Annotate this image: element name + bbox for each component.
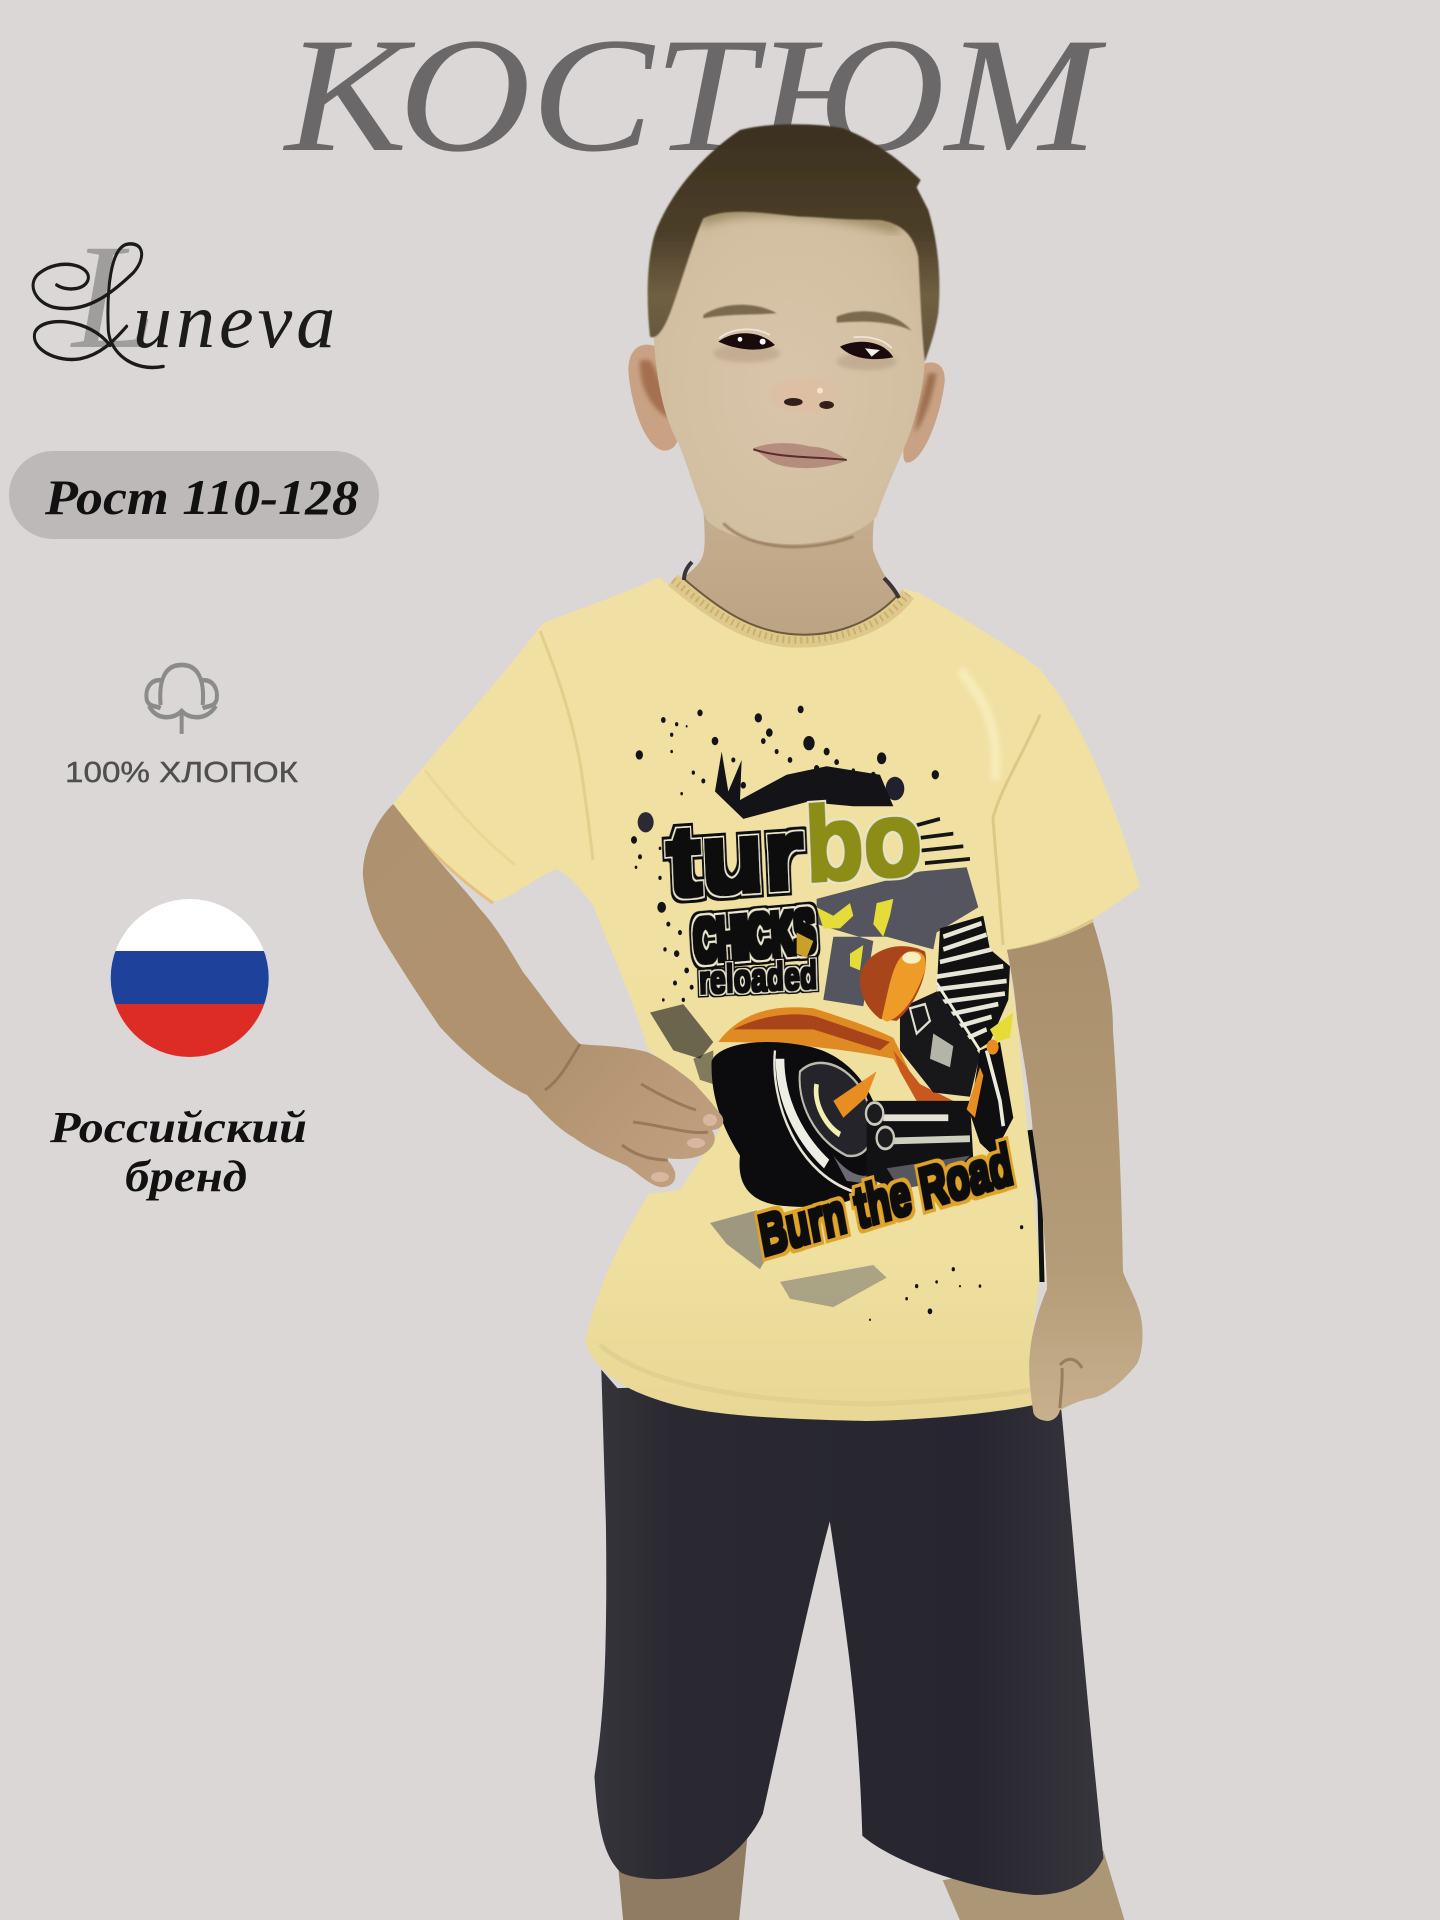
print: turbo lettering xyxy=(665,779,924,916)
cotton label: 100% ХЛОПОК xyxy=(65,757,298,789)
infographic canvas xyxy=(9,41,1142,1920)
icon: russian flag xyxy=(110,899,269,1057)
brand origin text xyxy=(49,1103,307,1201)
print: burn the road lettering: Burn the Road xyxy=(754,1134,1017,1268)
print: ink splatter xyxy=(631,706,1023,1321)
print: reloaded lettering: reloaded xyxy=(698,954,818,1002)
print: burn the road lettering xyxy=(710,1134,1017,1307)
print: rear wheel xyxy=(712,1042,884,1207)
height pill: Рост 110-128 xyxy=(44,469,359,525)
brand origin text: Российский xyxy=(49,1103,307,1152)
sleeve seams and folds xyxy=(393,631,1093,1404)
brand logo xyxy=(33,214,339,380)
white sliver beside shirt xyxy=(1036,1150,1058,1290)
print: yellow splash xyxy=(797,899,1013,1042)
print: chicks lettering: CHICKS xyxy=(692,898,817,976)
shorts xyxy=(594,1370,1103,1895)
right ear xyxy=(903,362,945,463)
icon: cotton boll xyxy=(146,665,217,734)
nose xyxy=(769,378,839,412)
boy head xyxy=(628,124,945,547)
left eye xyxy=(718,329,775,350)
left ear xyxy=(628,345,678,451)
print: engine xyxy=(900,983,980,1097)
print: exhaust pipes xyxy=(866,1101,973,1189)
mouth xyxy=(753,443,847,468)
print: turbo lettering: bo xyxy=(803,779,924,904)
finger creases xyxy=(545,1044,708,1160)
print: stripes xyxy=(917,819,1010,1050)
brand logo: L xyxy=(70,214,155,380)
right arm and hand xyxy=(1007,922,1143,1421)
black side line xyxy=(1030,1130,1042,1282)
brand origin text: бренд xyxy=(125,1152,247,1201)
eye shadows xyxy=(713,344,897,370)
print: front fork xyxy=(967,1039,1013,1156)
print: grey blocks xyxy=(817,867,978,1006)
title: КОСТЮМ xyxy=(283,5,1107,186)
brand logo: uneva xyxy=(133,277,339,364)
t-shirt xyxy=(393,577,1140,1421)
print: rear fender xyxy=(718,1007,953,1101)
chin crease xyxy=(723,523,853,547)
eyebrows xyxy=(703,305,912,331)
legs xyxy=(617,1836,1124,1920)
neck xyxy=(683,480,899,635)
print: fuel tank xyxy=(860,946,926,1022)
height pill xyxy=(9,451,379,539)
left arm and hand xyxy=(363,804,723,1187)
face xyxy=(653,193,925,544)
print: turbo lettering: tur xyxy=(665,799,806,916)
right eye xyxy=(840,337,893,359)
hair xyxy=(648,124,939,362)
collar xyxy=(673,580,908,640)
print: orange frame xyxy=(833,1071,877,1118)
t-shirt print: motorcycle xyxy=(631,706,1023,1321)
